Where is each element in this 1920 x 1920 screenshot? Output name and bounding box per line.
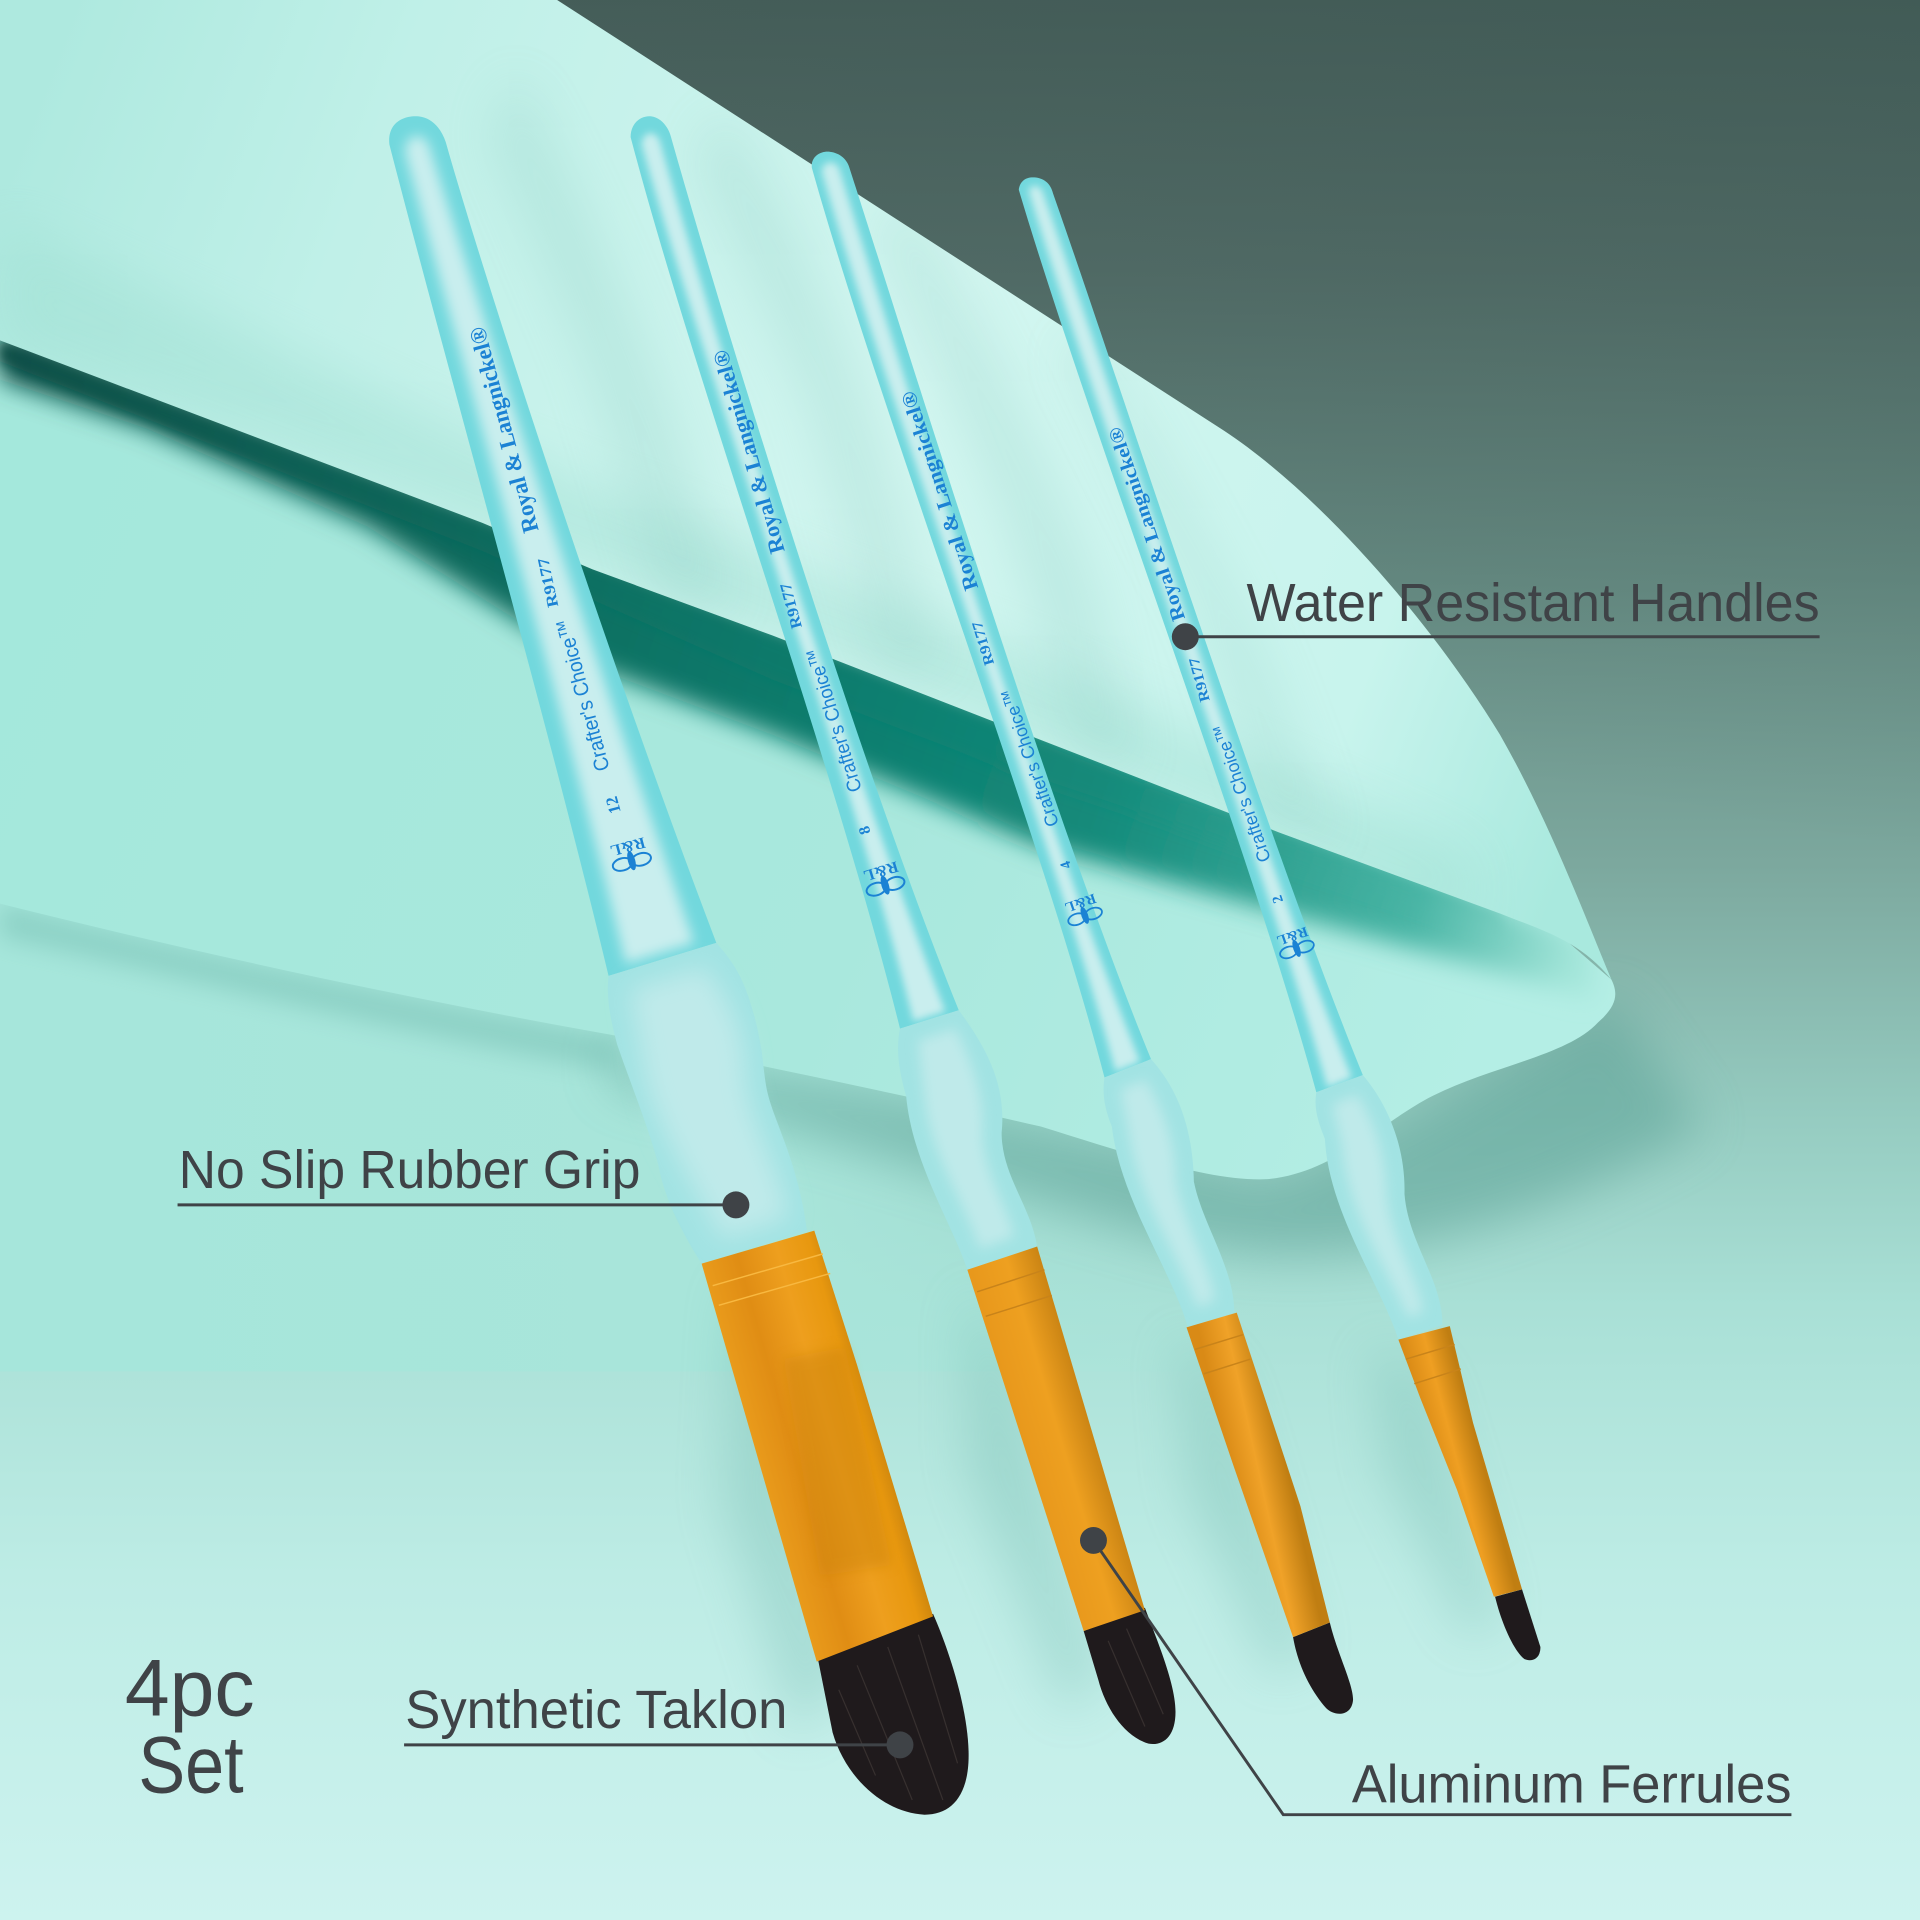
brush 4 bristles bbox=[1495, 1589, 1540, 1660]
brush 4 labels: R9177 bbox=[1186, 656, 1214, 704]
callout: No Slip Rubber Grip: No Slip Rubber Grip bbox=[179, 1140, 640, 1200]
brush 4 labels bbox=[1105, 424, 1316, 963]
callout: Aluminum Ferrules: Aluminum Ferrules bbox=[1352, 1754, 1791, 1814]
brush 1 labels: Royal & Langnickel® bbox=[465, 324, 545, 535]
brush 1 bristles bbox=[818, 1614, 969, 1815]
brush 1 ferrule bbox=[702, 1231, 933, 1662]
set size label: 4pc bbox=[125, 1644, 255, 1734]
brush 4 rubber grip bbox=[1316, 1075, 1442, 1340]
brush 4 ferrule bbox=[1398, 1326, 1522, 1597]
brush 3 labels: Crafter's Choice™ bbox=[996, 686, 1063, 830]
floor shadow under paper bbox=[0, 904, 1702, 1254]
brush 1 labels bbox=[465, 324, 653, 875]
brush 1 labels: R9177 bbox=[535, 556, 562, 609]
callout: Synthetic Taklon bbox=[404, 1680, 913, 1758]
brush 3 rubber grip bbox=[1104, 1059, 1234, 1327]
callout: Synthetic Taklon: Synthetic Taklon bbox=[405, 1680, 787, 1740]
brush 3 labels: R9177 bbox=[970, 619, 998, 667]
brush 1 labels: 12 bbox=[602, 794, 625, 816]
brush 4: size 2 bbox=[1019, 177, 1540, 1660]
brush 4 labels: R&L bbox=[1275, 923, 1310, 948]
brush 2 ferrule bbox=[967, 1247, 1145, 1631]
brush 3 labels: R&L bbox=[1063, 890, 1098, 915]
brush 2 handle bbox=[631, 116, 959, 1029]
brush 3 bristles bbox=[1293, 1622, 1353, 1714]
brush 2 labels: Royal & Langnickel® bbox=[708, 347, 790, 557]
brush 4 labels: Royal & Langnickel® bbox=[1105, 424, 1190, 623]
callout: Water Resistant Handles: Water Resistant Handles bbox=[1247, 573, 1820, 633]
brush 2 labels: 8 bbox=[856, 824, 874, 836]
brush 4 labels: 2 bbox=[1270, 893, 1287, 905]
brush 2 rubber grip bbox=[898, 1010, 1037, 1270]
callout: No Slip Rubber Grip bbox=[178, 1140, 749, 1218]
brush 2 labels bbox=[708, 347, 907, 900]
brush 3 labels: 4 bbox=[1057, 858, 1075, 871]
brush 3 handle bbox=[812, 152, 1151, 1078]
brush 2 labels: R9177 bbox=[777, 581, 806, 630]
brush 1 labels: R&L bbox=[608, 833, 647, 859]
brush 1 handle bbox=[389, 116, 716, 976]
brush 3 labels: Royal & Langnickel® bbox=[896, 388, 983, 594]
brush 2 labels: R&L bbox=[861, 857, 900, 884]
brush 1: size 12 bbox=[389, 116, 969, 1815]
set size label bbox=[125, 1644, 255, 1811]
brush 4 handle bbox=[1019, 177, 1363, 1092]
brush 2 labels: Crafter's Choice™ bbox=[802, 645, 867, 795]
brush 3: size 4 bbox=[812, 152, 1353, 1714]
callout: Water Resistant Handles bbox=[1172, 573, 1820, 650]
callout: Aluminum Ferrules bbox=[1080, 1527, 1791, 1815]
brush 4 labels: Crafter's Choice™ bbox=[1208, 722, 1275, 865]
brush 1 rubber grip bbox=[608, 943, 807, 1264]
panel: upper paper lobe bbox=[0, 0, 1611, 980]
brush 2: size 8 bbox=[631, 116, 1176, 1744]
brush 2 bristles bbox=[1084, 1608, 1176, 1744]
floor brush shadows bbox=[722, 1273, 1500, 1739]
brush 3 ferrule bbox=[1187, 1313, 1330, 1637]
brush 1 labels: Crafter's Choice™ bbox=[552, 616, 615, 774]
panel: lower paper lobe bbox=[0, 331, 1615, 1179]
brush 3 labels bbox=[896, 388, 1104, 929]
set size label: Set bbox=[138, 1721, 244, 1811]
